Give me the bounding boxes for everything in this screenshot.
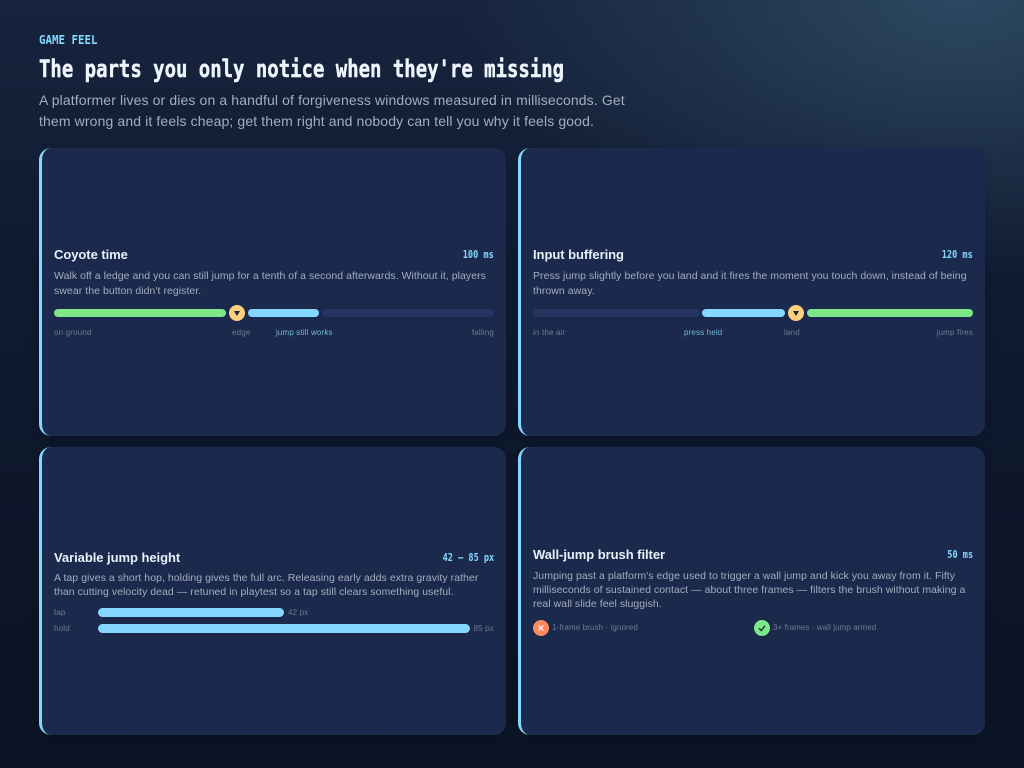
heading: wall-jump brush filter: Wall-jump brush filter (533, 547, 665, 562)
subtitle: A platformer lives or dies on a handful of forgiveness windows measured in milliseconds. Get (39, 92, 625, 108)
on ground bar (54, 309, 226, 317)
hold row (54, 624, 494, 633)
description: milliseconds of sustained contact — about three frames — filters the brush without making a (533, 584, 965, 596)
value: 50 ms: 50 ms (947, 548, 973, 561)
jump still works bar (248, 309, 319, 317)
description: thrown away. (533, 285, 595, 297)
panel: variable jump height (39, 447, 506, 735)
tap bar (98, 608, 284, 617)
subtitle: them wrong and it feels cheap; get them right and nobody can tell you why it feels good. (39, 113, 594, 129)
description: Press jump slightly before you land and it fires the moment you touch down, instead of being (533, 270, 967, 282)
description (533, 270, 967, 297)
timeline (533, 305, 973, 337)
hold bar (98, 624, 470, 633)
tap value: 42 px (288, 608, 308, 617)
land marker (788, 305, 804, 321)
value: 100 ms: 100 ms (463, 248, 494, 261)
falling bar (322, 309, 494, 317)
panel: coyote time (39, 148, 506, 436)
description: Jumping past a platform's edge used to trigger a wall jump and kick you away from it. Fifty (533, 570, 955, 582)
description (533, 570, 966, 610)
description: A tap gives a short hop, holding gives the full arc. Releasing early adds extra gravity rather (54, 572, 478, 584)
heading: variable jump height: Variable jump height (54, 550, 180, 565)
hold label: hold (54, 624, 70, 633)
title: The parts you only notice when they're missing (39, 55, 564, 83)
icon: check (754, 620, 770, 636)
brush ignored item (533, 620, 638, 636)
label: ignored: 1-frame brush · ignored (552, 623, 638, 632)
in the air bar (533, 309, 700, 317)
label: jump still works: jump still works (276, 328, 333, 337)
hold value: 85 px (474, 624, 494, 633)
description: swear the button didn't register. (54, 285, 201, 297)
heading: input buffering: Input buffering (533, 247, 624, 262)
eyebrow: GAME FEEL (39, 33, 98, 47)
label: jump fires: jump fires (937, 328, 973, 337)
description (54, 270, 486, 297)
tap row (54, 608, 308, 617)
tap label: tap (54, 608, 66, 617)
value: 120 ms: 120 ms (942, 248, 973, 261)
heading: coyote time: Coyote time (54, 247, 128, 262)
timeline (54, 305, 494, 337)
label: armed: 3+ frames · wall jump armed (773, 623, 876, 632)
description (54, 572, 478, 598)
description: Walk off a ledge and you can still jump for a tenth of a second afterwards. Without it, players (54, 270, 486, 282)
label: falling: falling (472, 328, 494, 337)
jump fires bar (807, 309, 973, 317)
panel: input buffering (518, 148, 985, 436)
value: 42-85 px: 42 — 85 px (442, 551, 494, 564)
label: edge: edge (232, 328, 251, 337)
label: in the air: in the air (533, 328, 565, 337)
label: press held: press held (684, 328, 722, 337)
description: than cutting velocity dead — retuned in playtest so a tap still clears something useful. (54, 586, 454, 598)
panel: wall-jump brush filter (518, 447, 985, 735)
label: on ground: on ground (54, 328, 92, 337)
label: land: land (784, 328, 800, 337)
icon: cross (533, 620, 549, 636)
description: real wall slide feel sluggish. (533, 598, 662, 610)
bar chart (54, 608, 494, 633)
press held bar (702, 309, 785, 317)
subtitle (39, 92, 625, 129)
wall jump armed item (754, 620, 876, 636)
edge marker (228, 305, 244, 321)
